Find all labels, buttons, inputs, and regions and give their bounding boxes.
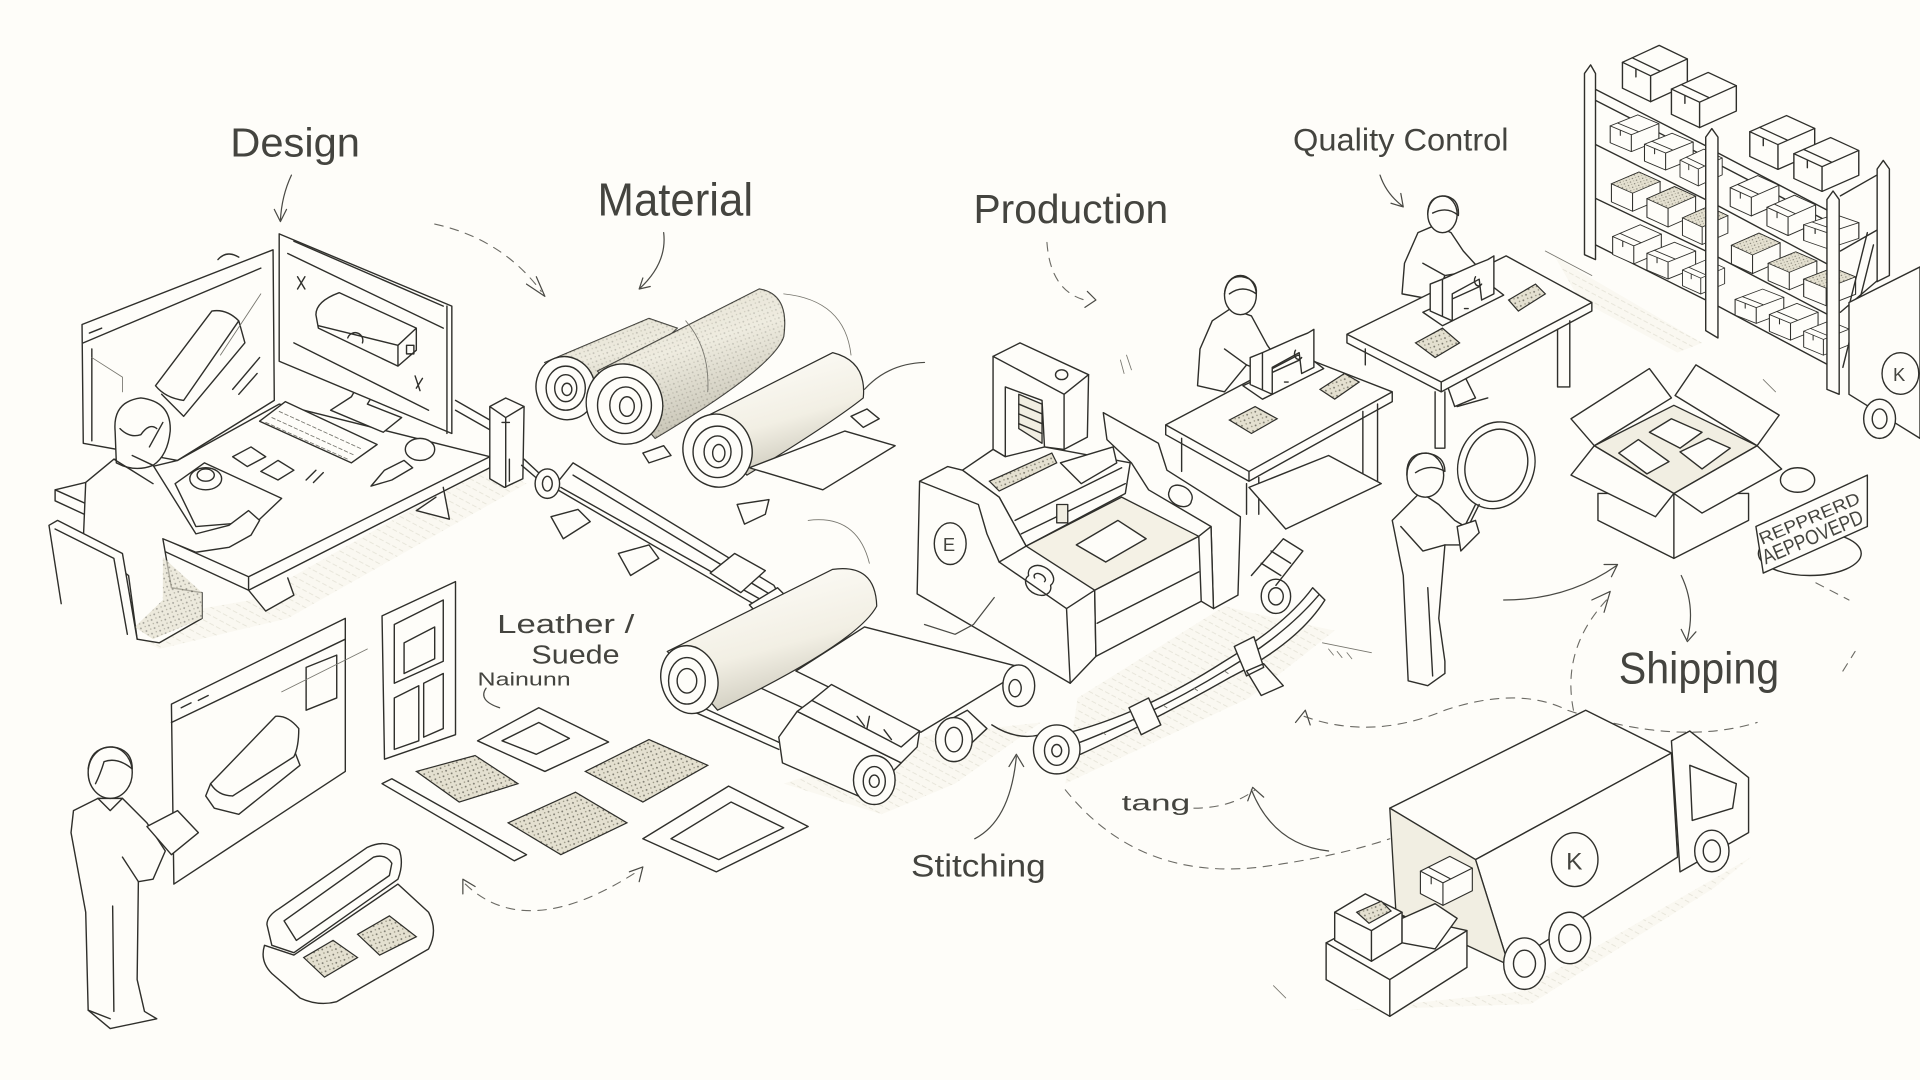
- arrow: material pointer: [639, 233, 664, 289]
- small sketch marks: [808, 251, 1776, 998]
- sewing machine 2: [1423, 256, 1504, 326]
- emblem C: [1026, 565, 1054, 595]
- table 1 legs: [1182, 404, 1378, 514]
- worker 2: [1402, 196, 1488, 407]
- middle cavity: [962, 447, 1130, 546]
- cab: [1671, 731, 1749, 872]
- clipboard desk: [1249, 456, 1381, 529]
- emblem E: E: [943, 534, 955, 555]
- client figure with tablet: [71, 747, 198, 1029]
- tray: [1026, 497, 1199, 590]
- inspector with magnifier: [1392, 411, 1547, 686]
- template plate: [478, 708, 609, 771]
- truck at right edge: K: [1893, 364, 1906, 385]
- curved arrow below swatches: [465, 872, 637, 911]
- arrow: quality pointer: [1380, 175, 1403, 207]
- station: design desk: [49, 120, 490, 643]
- leather pieces 2: [1416, 284, 1545, 358]
- right wing: [1103, 413, 1240, 609]
- arrow: production pointer: [1047, 242, 1090, 301]
- shelf boards: [1596, 89, 1883, 365]
- left body: [917, 467, 1096, 683]
- heading: Design: Design: [230, 120, 360, 166]
- table 2 legs: [1365, 321, 1570, 448]
- station: leather and suede: Suede: [531, 642, 620, 670]
- note arrow: [484, 688, 500, 708]
- heading: Quality Control: Quality Control: [1293, 122, 1509, 158]
- mouse and stylus: [371, 438, 435, 486]
- shelf posts: [1584, 65, 1889, 394]
- floor shading: [110, 257, 1751, 1010]
- belt plane: [796, 627, 1026, 732]
- lower plate: [797, 700, 920, 763]
- stacked crates: [1326, 894, 1467, 1016]
- logo K: K: [1566, 848, 1583, 875]
- station: material rolls: [527, 174, 924, 524]
- logo K: [1551, 833, 1598, 887]
- arrow: design to material: [435, 224, 541, 291]
- magnifier: [1446, 411, 1547, 551]
- top boxes: [1622, 45, 1859, 191]
- paper swatches: [233, 447, 323, 482]
- seamstress table 1: [1166, 276, 1392, 514]
- row 4 boxes: [1613, 225, 1849, 355]
- seamstress table 2: [1293, 122, 1592, 448]
- row 2 boxes: [1610, 115, 1859, 249]
- work piece: [1076, 520, 1146, 562]
- roll 1: [527, 318, 677, 428]
- approved stamp: REPPRERD: [1756, 488, 1863, 549]
- cargo inside: [1420, 856, 1472, 905]
- upper block: [812, 684, 920, 747]
- arrow head: production: [1085, 291, 1096, 307]
- sewing machine 1: [1243, 329, 1324, 399]
- note: tang: tang: [1122, 791, 1190, 816]
- monitor stand: [331, 386, 402, 432]
- open carton: [1571, 365, 1782, 558]
- roll 2: [575, 289, 851, 455]
- keyboard: [260, 402, 377, 463]
- conveyor arm 1: [535, 463, 790, 618]
- heading: Material: Material: [598, 174, 753, 226]
- note: tang: [1122, 790, 1255, 816]
- label: Leather / Suede: Leather /: [497, 611, 635, 639]
- worker 1: [1198, 276, 1283, 392]
- tablet: [175, 463, 282, 527]
- cargo box: [1390, 710, 1671, 860]
- wheels: [1504, 830, 1729, 989]
- arch press: [993, 343, 1089, 457]
- leather sheet: [749, 431, 895, 490]
- big roll: [653, 569, 877, 720]
- central conveyor and big roll: [653, 569, 1041, 804]
- roll 3: [673, 353, 924, 497]
- emblem E: [934, 523, 966, 564]
- row 3 boxes: [1611, 172, 1856, 306]
- left monitor: [82, 250, 274, 460]
- warehouse shelf: [1584, 45, 1920, 438]
- shelf brace: [1843, 233, 1873, 367]
- suede swatches: [416, 740, 708, 855]
- small note: Nainunn: [478, 669, 571, 690]
- leather frame: [643, 786, 808, 872]
- door panel: [382, 582, 456, 759]
- small swatches: [643, 409, 879, 524]
- arrow: shipping pointer: [1681, 576, 1696, 642]
- table 1 top: [1166, 355, 1392, 481]
- lower dashed loop: [1065, 787, 1390, 869]
- designer figure: [83, 398, 260, 643]
- station: stitching: [911, 754, 1046, 884]
- heading: Production: Production: [973, 186, 1168, 232]
- approved stamp: [1756, 468, 1867, 576]
- leather pieces 1: [1229, 373, 1359, 433]
- arrow: stitching pointer: [975, 754, 1024, 839]
- station: leather and suede: [171, 582, 808, 884]
- truck at right edge: [1849, 267, 1920, 438]
- arrow heads below swatches: [463, 867, 643, 894]
- heading: Stitching: Stitching: [911, 848, 1046, 884]
- arrow head: design to material: [527, 277, 545, 296]
- delivery truck: [1326, 710, 1749, 1016]
- dashed arrows to shipping: [1296, 564, 1855, 732]
- station: shipping box: [1296, 365, 1867, 732]
- curved conveyor to quality: [1033, 539, 1371, 774]
- front panel: [1095, 527, 1213, 656]
- inspector figure: [1392, 453, 1469, 686]
- emblem C2: [1169, 485, 1192, 507]
- design screen: [171, 618, 367, 884]
- chair: [49, 520, 137, 639]
- approved stamp: AEPPOVEPD: [1759, 506, 1867, 569]
- arrow: design pointer: [274, 175, 291, 222]
- table 2 top: [1347, 256, 1592, 392]
- lower roll: [779, 711, 901, 797]
- long strip: [382, 779, 527, 861]
- right monitor: [279, 234, 452, 433]
- station: production machine: [917, 186, 1240, 683]
- heading: Shipping: Shipping: [1619, 644, 1779, 693]
- desk: [55, 404, 490, 611]
- connector post and arm: [456, 398, 541, 487]
- open case product: [263, 844, 433, 1003]
